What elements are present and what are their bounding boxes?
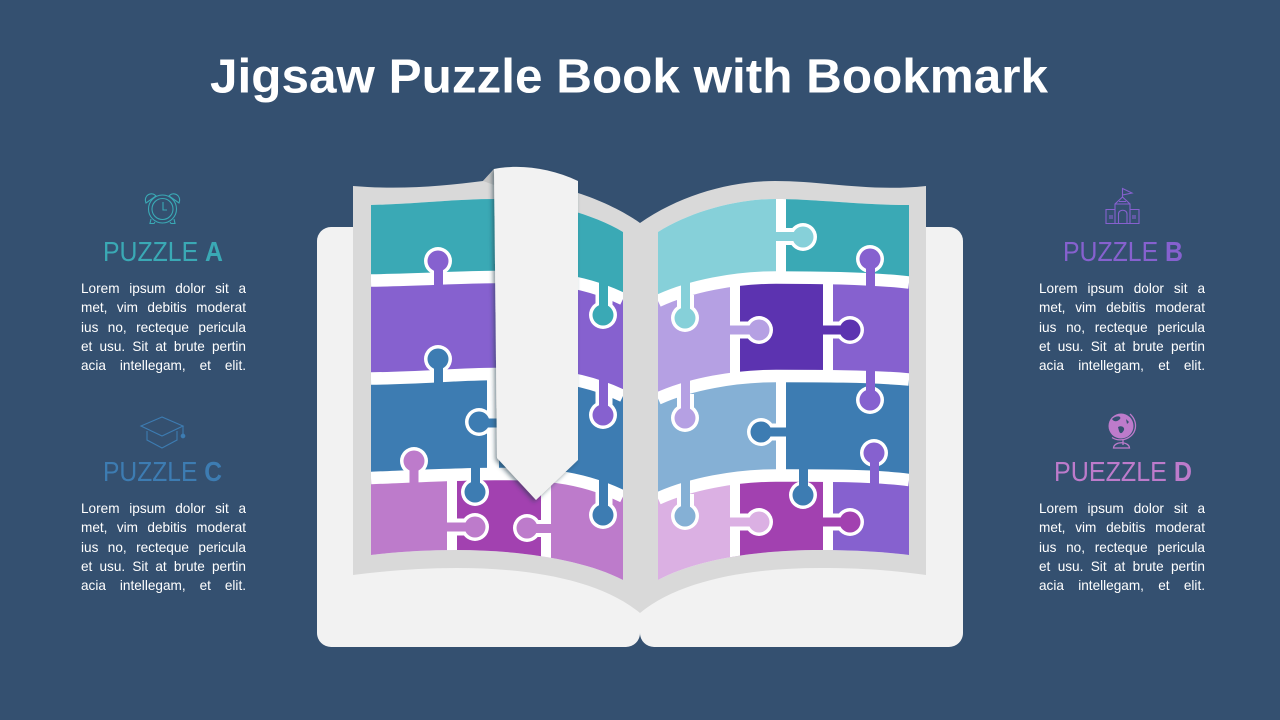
knob: light teal into teal <box>775 223 817 251</box>
knob: magenta into purple <box>823 508 864 536</box>
text: puzzle C body: et usu. Sit at brute pertin <box>81 559 246 574</box>
icon: graduation cap <box>140 416 186 448</box>
knob: pink into magenta, left <box>447 513 489 541</box>
text: puzzle B body: et usu. Sit at brute pertin <box>1039 339 1205 354</box>
knob: dark purple into purple <box>823 316 864 344</box>
knob: purple into blue, lower <box>860 439 888 484</box>
text: puzzle D body: ius no, recteque pericula <box>1039 540 1205 555</box>
text: puzzle A body: met, vim debitis moderat <box>81 300 246 315</box>
knob: blue into light blue <box>747 418 786 446</box>
text: puzzle C body: met, vim debitis moderat <box>81 520 246 535</box>
knob: pink into magenta, right <box>513 514 551 542</box>
text: puzzle A body: ius no, recteque pericula <box>81 320 246 335</box>
row 2 pieces <box>371 283 623 390</box>
panel: puzzle C <box>81 416 246 593</box>
row 3 pieces <box>658 380 909 492</box>
heading: puzzle C: PUZZLE C <box>103 456 222 487</box>
bookmark <box>483 167 578 500</box>
text: puzzle B body: Lorem ipsum dolor sit a <box>1039 281 1205 296</box>
right page puzzle <box>658 199 909 580</box>
knob: purple into blue <box>589 378 617 429</box>
icon: globe <box>1108 414 1136 449</box>
text: puzzle B body: met, vim debitis moderat <box>1039 300 1205 315</box>
knob: light pink into magenta <box>730 508 773 536</box>
knob: light teal into lavender <box>671 280 699 332</box>
row 1 pieces <box>371 199 623 292</box>
text: puzzle D body: acia intellegam, et elit. <box>1039 578 1205 593</box>
heading: puzzle B: PUZZLE B <box>1063 236 1183 267</box>
knob: blue into magenta <box>461 467 489 506</box>
white gaps <box>371 277 623 566</box>
text: puzzle B body <box>1039 281 1205 373</box>
text: puzzle A body: Lorem ipsum dolor sit a <box>81 281 246 296</box>
row 1 pieces <box>658 199 909 294</box>
knob: lavender into light blue <box>671 380 699 432</box>
text: puzzle C body: acia intellegam, et elit. <box>81 578 246 593</box>
open puzzle book <box>317 166 963 647</box>
text: puzzle D body <box>1039 501 1205 593</box>
knob: light blue into pink <box>671 478 699 530</box>
knob: blue into purple <box>424 345 452 385</box>
knob: lavender into dark purple <box>730 316 773 344</box>
row 4 pieces <box>371 479 623 580</box>
row 3 pieces <box>371 380 623 490</box>
icon: castle <box>1105 188 1140 224</box>
panel: puzzle A <box>81 193 246 373</box>
left page puzzle <box>371 199 623 580</box>
heading: puzzle D: PUEZZLE D <box>1054 456 1192 487</box>
knob: blue into magenta <box>789 468 817 509</box>
text: puzzle D body: met, vim debitis moderat <box>1039 520 1205 535</box>
text: puzzle B body: ius no, recteque pericula <box>1039 320 1205 335</box>
white gaps <box>658 195 909 578</box>
icon: alarm clock <box>144 193 180 224</box>
text: puzzle C body: ius no, recteque pericula <box>81 540 246 555</box>
text: puzzle A body: acia intellegam, et elit. <box>81 358 246 373</box>
text: puzzle C body: Lorem ipsum dolor sit a <box>81 501 246 516</box>
title: Jigsaw Puzzle Book with Bookmark <box>210 50 1048 104</box>
text: puzzle D body: et usu. Sit at brute pertin <box>1039 559 1205 574</box>
panel: puzzle B <box>1039 188 1205 373</box>
knob: blue into left piece <box>465 408 497 436</box>
heading: puzzle A: PUZZLE A <box>103 236 223 267</box>
knob: teal into purple <box>589 278 617 329</box>
row 2 pieces <box>658 283 909 392</box>
knob: purple into blue <box>856 370 884 414</box>
book cover <box>317 227 963 647</box>
panel: puzzle D <box>1039 414 1205 593</box>
text: puzzle A body <box>81 281 246 373</box>
row 4 pieces <box>658 480 909 580</box>
text: puzzle D body: Lorem ipsum dolor sit a <box>1039 501 1205 516</box>
knob: purple into teal <box>856 245 884 288</box>
text: puzzle C body <box>81 501 246 593</box>
knob: purple into teal <box>424 247 452 287</box>
knob: blue into pink <box>589 476 617 529</box>
text: puzzle A body: et usu. Sit at brute pertin <box>81 339 246 354</box>
page frame <box>353 169 926 613</box>
text: puzzle B body: acia intellegam, et elit. <box>1039 358 1205 373</box>
knob: pink into blue <box>400 447 428 485</box>
